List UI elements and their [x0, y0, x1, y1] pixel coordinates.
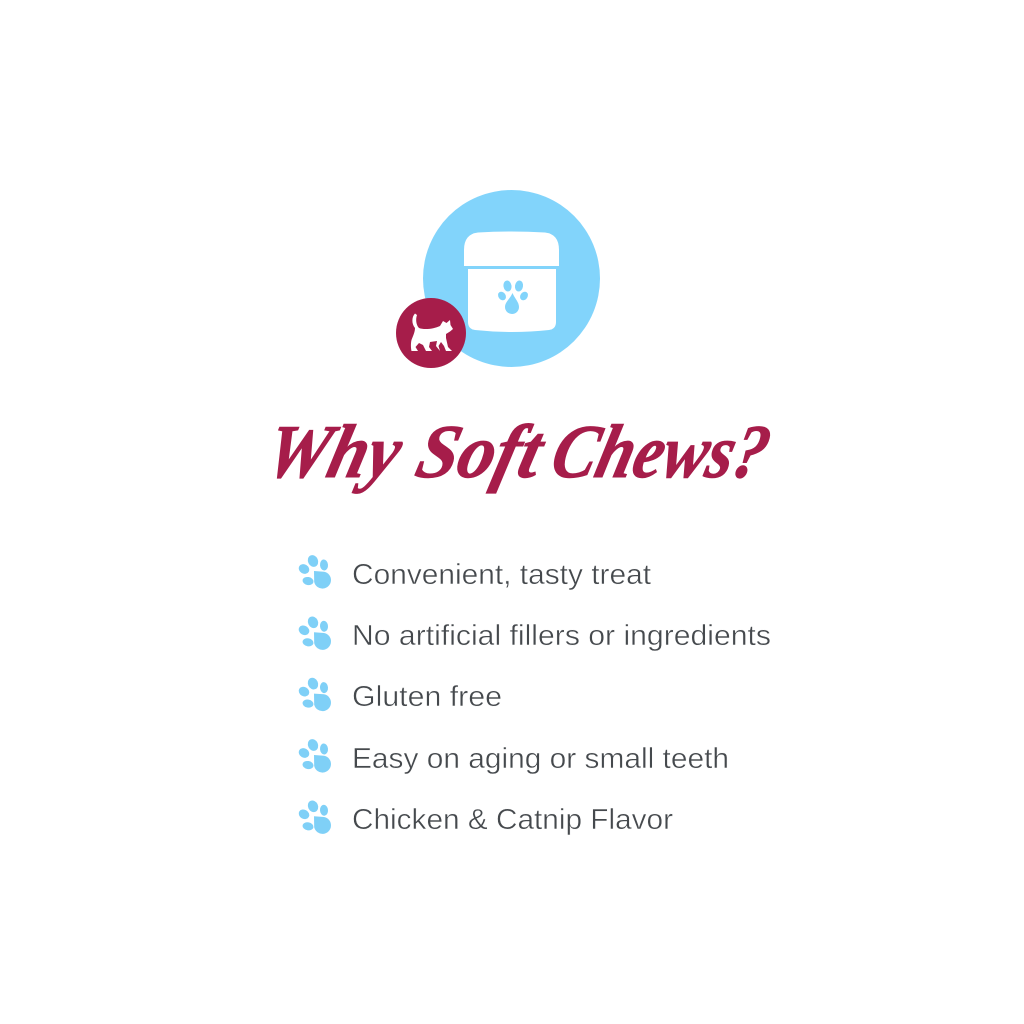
bullet list	[297, 553, 771, 836]
list item: no artificial	[297, 615, 771, 652]
title	[258, 409, 779, 494]
list item: flavor	[297, 799, 673, 836]
text: easy on teeth: Easy on aging or small teeth	[352, 743, 729, 775]
title: Why	[258, 409, 412, 494]
icon: cat silhouette	[411, 314, 453, 351]
icon: paw bullet	[297, 553, 331, 589]
icon: paw bullet	[297, 676, 331, 711]
title: Chews?	[544, 409, 779, 494]
list item: gluten free	[297, 676, 502, 713]
title: Soft	[409, 409, 554, 494]
icon: red badge circle	[396, 298, 466, 368]
text: flavor: Chicken & Catnip Flavor	[352, 804, 673, 836]
text: gluten free: Gluten free	[352, 681, 502, 713]
text: no artificial: No artificial fillers or ingredients	[352, 620, 771, 652]
icon: jar body	[468, 269, 556, 332]
list item: easy on teeth	[297, 737, 729, 775]
icon: jar lid	[464, 232, 559, 266]
icon: blue circle	[423, 190, 600, 367]
icon: soft chews jar with cat badge	[396, 190, 600, 368]
text: convenient: Convenient, tasty treat	[352, 559, 651, 591]
icon: paw bullet	[297, 737, 331, 773]
icon: paw on jar	[496, 280, 530, 314]
list item: convenient	[297, 553, 651, 591]
icon: paw bullet	[297, 799, 331, 834]
icon: paw bullet	[297, 615, 331, 650]
